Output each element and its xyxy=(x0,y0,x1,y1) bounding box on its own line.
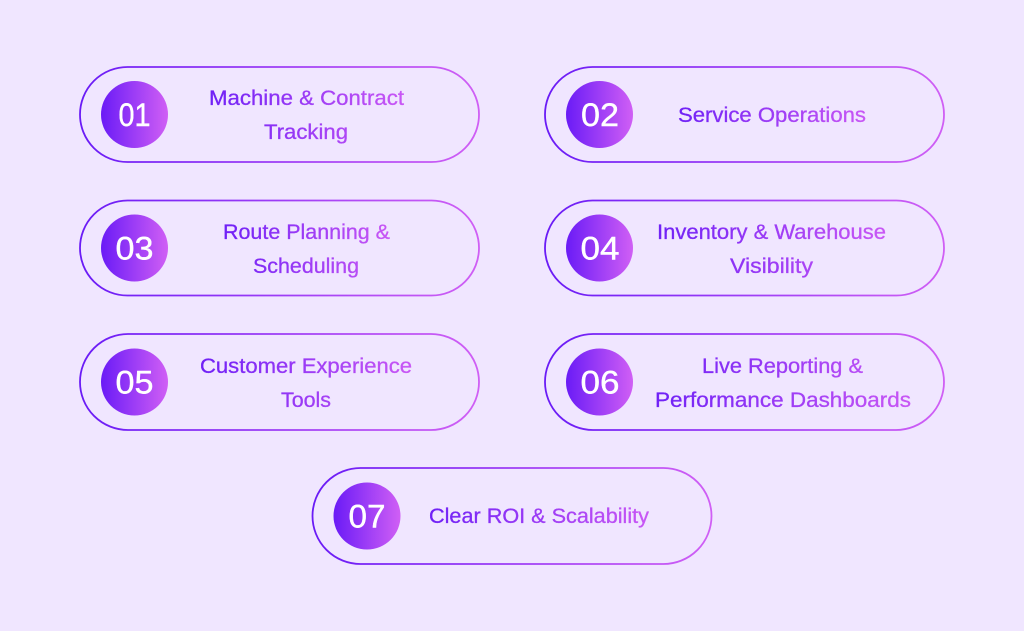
badge: 04: 04 xyxy=(580,230,620,266)
panel: 05 Customer Experience Tools xyxy=(80,334,479,430)
panel: 04 Inventory & Warehouse Visibility xyxy=(545,200,944,296)
label: Machine & Contract Tracking xyxy=(209,87,404,144)
panel: 01 Machine & Contract Tracking xyxy=(80,67,479,162)
label: Route Planning & Scheduling: Route Planning & xyxy=(223,221,390,244)
label: Customer Experience Tools xyxy=(200,355,412,412)
panel: 03 Route Planning & Scheduling xyxy=(80,200,479,296)
panel: 07 Clear ROI & Scalability xyxy=(312,468,712,564)
panel: 06 Live Reporting & Performance Dashboards xyxy=(545,334,944,430)
label: Customer Experience Tools: Tools xyxy=(281,389,331,412)
label: Live Reporting & Performance Dashboards: Performance Dashboards xyxy=(655,389,911,412)
badge: 01 xyxy=(101,81,168,148)
label: Live Reporting & Performance Dashboards: Live Reporting & xyxy=(702,355,863,378)
badge: 03 xyxy=(101,214,168,282)
badge: 05: 05 xyxy=(116,364,154,400)
badge: 04 xyxy=(566,214,633,282)
label: Live Reporting & Performance Dashboards xyxy=(655,355,911,412)
label: Route Planning & Scheduling xyxy=(223,221,390,278)
badge: 03: 03 xyxy=(116,230,154,266)
badge: 02: 02 xyxy=(581,97,619,133)
label: Inventory & Warehouse Visibility: Inventory & Warehouse xyxy=(657,221,886,244)
badge: 06: 06 xyxy=(580,364,620,400)
badge: 07: 07 xyxy=(348,498,386,534)
badge: 05 xyxy=(101,348,168,416)
label: Inventory & Warehouse Visibility xyxy=(657,221,886,278)
badge: 02 xyxy=(566,81,633,148)
badge: 01: 01 xyxy=(118,97,150,133)
label: Customer Experience Tools: Customer Experience xyxy=(200,355,412,378)
badge: 07 xyxy=(334,482,400,550)
label: Inventory & Warehouse Visibility: Visibility xyxy=(730,255,814,278)
badge: 06 xyxy=(566,348,633,416)
label: Machine & Contract Tracking: Tracking xyxy=(264,121,348,144)
panel: 02 Service Operations xyxy=(545,67,944,162)
label: Clear ROI & Scalability: Clear ROI & Scalability xyxy=(429,505,650,528)
label: Machine & Contract Tracking: Machine & Contract xyxy=(209,87,404,110)
label: Service Operations: Service Operations xyxy=(678,104,866,127)
label: Route Planning & Scheduling: Scheduling xyxy=(253,255,359,278)
